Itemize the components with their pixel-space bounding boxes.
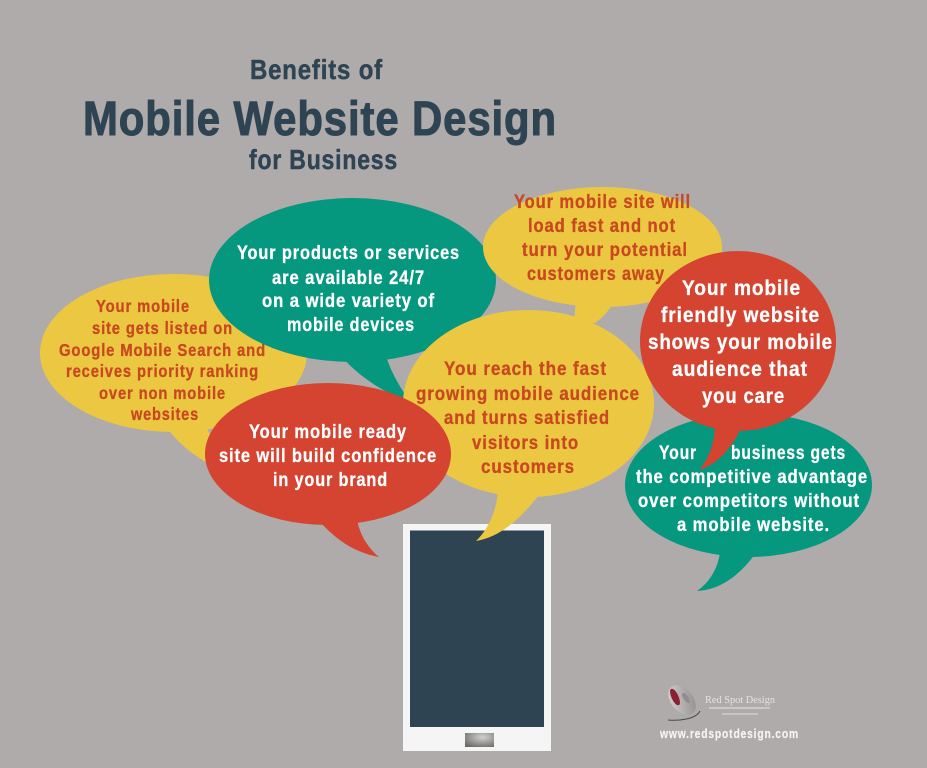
phone [403,524,551,751]
title: Mobile Website Design [83,93,557,146]
logo: Red Spot Design: Red Spot Design [705,694,775,706]
bubble: competitive advantage: the competitive advantage [636,467,868,488]
bubble: mobile audience [403,310,654,541]
bubble: you care: audience that [672,357,808,381]
bubble: fast loading: customers away [527,264,665,285]
title [83,54,557,175]
bubble: you care: you care [702,384,785,408]
website url: www.redspotdesign.com [659,727,799,741]
bubble: availability: are available 24/7 [272,268,425,289]
bubble: you care: shows your mobile [648,330,833,354]
bubble: competitive advantage: Your [659,443,697,464]
bubble: mobile audience: growing mobile audience [416,384,640,405]
bubble: confidence: in your brand [273,470,388,491]
bubble: fast loading [483,187,722,323]
bubble: you care [640,251,836,470]
bubble: mobile audience: customers [481,457,575,478]
bubble: mobile audience: You reach the fast [444,359,607,380]
bubble: fast loading: turn your potential [522,240,688,261]
bubble: Google listing [40,274,307,474]
bubble: Google listing: receives priority ranking [66,361,259,381]
bubble: Google listing: websites [130,404,199,424]
bubble: availability: Your products or services [237,243,460,264]
title: for Business [249,144,398,175]
bubble: Google listing: over non mobile [99,383,226,403]
bubble: confidence: Your mobile ready [249,422,407,443]
bubble: you care: friendly website [661,303,820,327]
bubble: fast loading: Your mobile site will [514,192,691,213]
bubble: Google listing: Google Mobile Search and [59,340,266,360]
bubble: Google listing: Your mobile [96,296,190,316]
bubble: mobile audience: and turns satisfied [444,408,610,429]
bubble: competitive advantage: business gets [731,443,846,464]
bubble: competitive advantage [625,413,872,591]
bubble: you care: Your mobile [682,276,801,300]
title: Benefits of [250,54,383,85]
bubble: confidence: site will build confidence [219,446,437,467]
bubble: availability [209,198,496,402]
icon: mouse [663,680,701,720]
bubble: mobile audience: visitors into [472,433,579,454]
bubble: competitive advantage: a mobile website. [677,515,830,536]
bubble: competitive advantage: over competitors without [638,491,860,512]
bubble: fast loading: load fast and not [528,216,676,237]
bubble: availability: on a wide variety of [262,291,435,312]
logo: Red Spot Design [663,680,775,720]
bubble: confidence [205,383,451,557]
bubble: availability: mobile devices [287,315,415,336]
bubble: Google listing: site gets listed on [92,318,233,338]
